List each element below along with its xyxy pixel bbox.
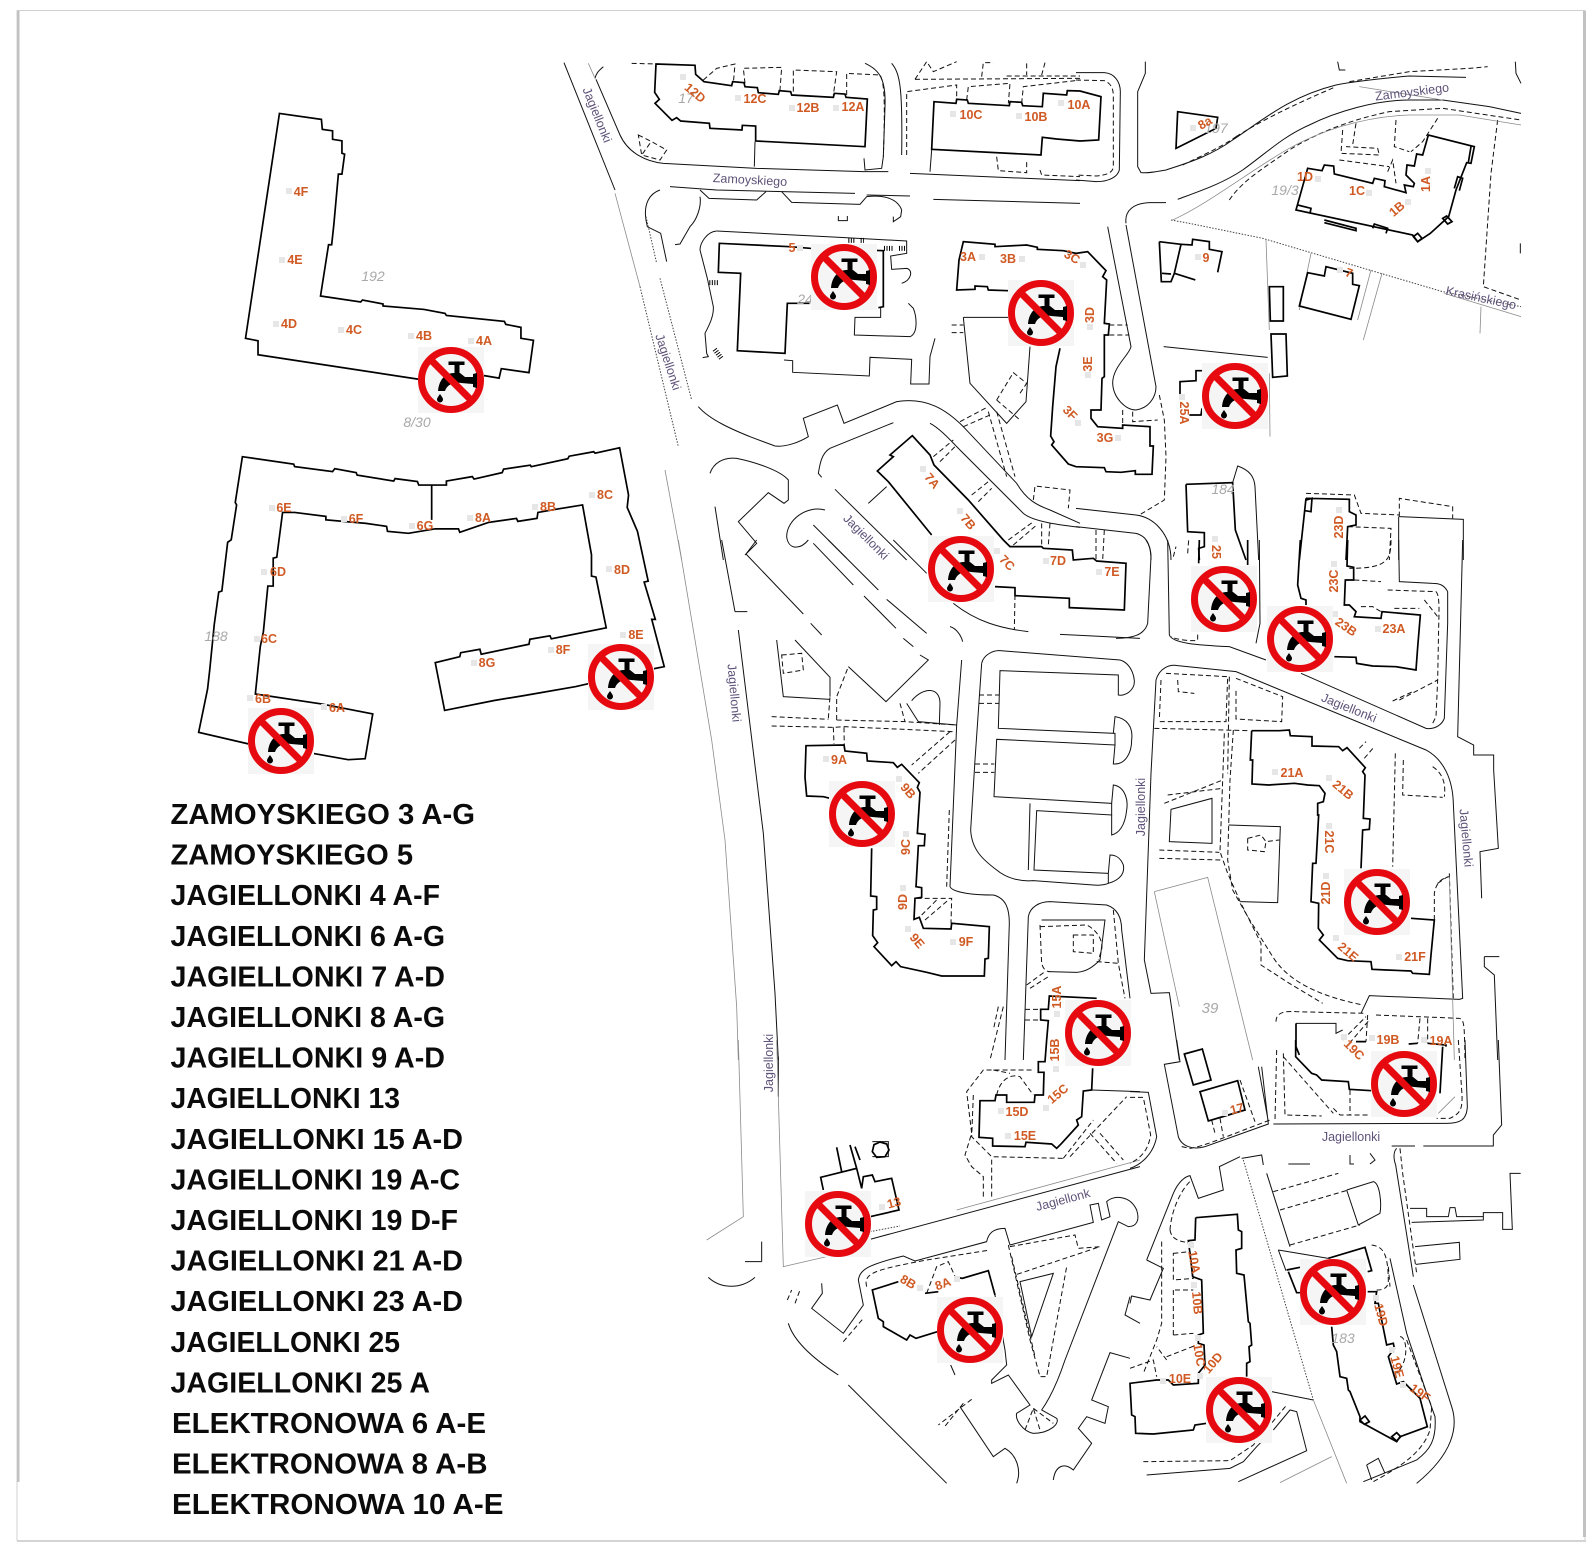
footpaths xyxy=(1130,1040,1462,1482)
building entrance labels: 21C xyxy=(1322,831,1336,853)
street names: Jagiellonki xyxy=(1319,691,1379,725)
roads xyxy=(708,1057,1140,1483)
footpaths xyxy=(1154,540,1465,1060)
building entrance labels: 6C xyxy=(261,632,277,646)
building entrance labels: 10E xyxy=(1169,1372,1191,1386)
gray plot numbers: 188 xyxy=(204,628,228,644)
building entrance labels: 6B xyxy=(255,692,271,706)
building entrance labels: 12A xyxy=(842,100,864,114)
building entrance labels: 15A xyxy=(1050,986,1064,1008)
icon: no water, Elektronowa 8 xyxy=(937,1297,1003,1363)
building entrance labels: 8D xyxy=(614,563,630,577)
street names: Jagiellonki xyxy=(1134,778,1148,836)
building entrance labels: 9B xyxy=(898,780,918,802)
building entrance labels: 1D xyxy=(1297,170,1313,184)
building entrance labels: 4D xyxy=(281,317,297,331)
gray plot numbers: 197 xyxy=(1204,120,1229,136)
icon: no water, Jagiellonki 25A xyxy=(1202,363,1268,429)
footpaths xyxy=(632,62,1080,545)
address list: JAGIELLONKI 19 D-F xyxy=(170,1205,458,1237)
street names: Zamoyskiego xyxy=(713,171,788,189)
map: north-west section xyxy=(564,62,1153,610)
building entrance labels: 9D xyxy=(896,894,910,910)
building entrance labels: 3G xyxy=(1097,431,1113,445)
gray plot numbers: 19/3 xyxy=(1271,182,1299,198)
street names: Zamoyskiego xyxy=(1374,81,1450,103)
building entrance labels: 25A xyxy=(1177,402,1191,424)
building outlines 4, 6 and 8 xyxy=(199,113,664,760)
building entrance labels: 8G xyxy=(479,656,495,670)
street names: Jagiellonki xyxy=(580,85,614,145)
building entrance labels: 13 xyxy=(885,1194,903,1212)
map: south-east section xyxy=(1130,1040,1521,1483)
building entrance labels: 17 xyxy=(1228,1100,1246,1118)
building entrance labels: 7C xyxy=(996,552,1018,574)
icon: no water, Jagiellonki 15 xyxy=(1065,1000,1131,1066)
gray plot numbers: 184 xyxy=(1211,481,1235,497)
building entrance labels: 4B xyxy=(416,329,432,343)
icon: no water, Jagiellonki 4 xyxy=(418,347,484,413)
map: north-east section xyxy=(1076,62,1521,560)
building entrance labels: 4C xyxy=(346,323,362,337)
building entrance labels: 7A xyxy=(922,470,942,492)
building entrance labels: 15B xyxy=(1048,1039,1062,1061)
map: east-central section xyxy=(1116,540,1499,1060)
roads xyxy=(1130,1040,1521,1483)
building entrance labels: 8A xyxy=(475,511,491,525)
roads and parking xyxy=(722,540,1140,1060)
building entrance labels: 3F xyxy=(1060,403,1080,423)
building entrance labels: 19A xyxy=(1430,1034,1452,1048)
building entrance labels: 12C xyxy=(744,92,766,106)
building entrance labels: 7B xyxy=(958,511,978,533)
building entrance labels: 25 xyxy=(1209,545,1223,559)
buildings 17, 19 D-F, elektronowa 10 xyxy=(1130,1040,1443,1442)
building entrance labels: 6A xyxy=(329,701,345,715)
building entrance labels: 23B xyxy=(1333,615,1359,639)
building entrance labels: 1A xyxy=(1419,176,1433,192)
building entrance labels: 10B xyxy=(1189,1291,1205,1315)
building entrance labels: 15C xyxy=(1045,1081,1071,1107)
street names: Jagiellonki xyxy=(1322,1130,1380,1144)
building entrance labels: 10C xyxy=(1190,1342,1208,1368)
building entrance labels: 4A xyxy=(476,334,492,348)
building entrance labels: 10A xyxy=(1068,98,1090,112)
building entrance labels: 3D xyxy=(1083,307,1097,323)
building entrance labels: 3E xyxy=(1081,356,1095,372)
building entrance labels: 15E xyxy=(1014,1129,1036,1143)
building entrance labels: 19E xyxy=(1387,1354,1407,1380)
building entrance labels: 10B xyxy=(1025,110,1047,124)
address list: JAGIELLONKI 13 xyxy=(170,1083,400,1115)
street names: Jagiellonki xyxy=(762,1034,776,1092)
address list: JAGIELLONKI 15 A-D xyxy=(170,1124,463,1156)
address list: JAGIELLONKI 4 A-F xyxy=(170,880,440,912)
address list: JAGIELLONKI 9 A-D xyxy=(170,1043,445,1075)
building entrance labels: 6G xyxy=(417,519,433,533)
map: south-west section xyxy=(707,1040,1140,1483)
building entrance labels: 21E xyxy=(1335,939,1361,965)
icon: no water, Jagiellonki 25 xyxy=(1191,566,1257,632)
building entrance labels: 9E xyxy=(907,931,927,951)
address markers xyxy=(247,74,1431,1388)
building entrance labels: 4E xyxy=(287,253,303,267)
building entrance labels: 9 xyxy=(1203,251,1210,265)
roads xyxy=(1076,62,1521,560)
building entrance labels: 8A xyxy=(933,1275,953,1293)
street names: Jagiellonki xyxy=(840,511,892,563)
address list: JAGIELLONKI 7 A-D xyxy=(170,961,445,993)
building entrance labels: 5 xyxy=(789,241,796,255)
building entrance labels: 9F xyxy=(959,935,974,949)
building entrance labels: 6E xyxy=(276,501,292,515)
gray plot numbers: 39 xyxy=(1202,1000,1219,1017)
footpaths xyxy=(1076,67,1521,560)
building entrance labels: 7D xyxy=(1050,554,1066,568)
building entrance labels: 3C xyxy=(1062,247,1082,267)
address list: ELEKTRONOWA 8 A-B xyxy=(172,1449,488,1481)
gray plot numbers: 192 xyxy=(361,268,385,284)
building entrance labels: 19D xyxy=(1371,1302,1391,1328)
building entrance labels: 23A xyxy=(1383,622,1405,636)
building entrance labels: 10D xyxy=(1200,1350,1226,1376)
address list: ELEKTRONOWA 6 A-E xyxy=(172,1408,486,1440)
address list xyxy=(170,799,504,1521)
street names: Jagiellonki xyxy=(724,663,744,723)
building entrance labels: 8B xyxy=(898,1272,918,1292)
street names: Krasińskiego xyxy=(1445,284,1517,312)
address list: JAGIELLONKI 23 A-D xyxy=(170,1286,463,1318)
building entrance labels: 23D xyxy=(1332,516,1346,538)
icon: no water, Jagiellonki 6 xyxy=(248,708,314,774)
address list: ZAMOYSKIEGO 3 A-G xyxy=(170,799,475,831)
building entrance labels xyxy=(255,80,1452,1405)
address list: JAGIELLONKI 6 A-G xyxy=(170,921,445,953)
building entrance labels: 1B xyxy=(1386,199,1408,219)
gray plot numbers: 183 xyxy=(1331,1330,1355,1346)
building entrance labels: 8B xyxy=(540,500,556,514)
building entrance labels: 7 xyxy=(1343,265,1355,281)
street names: Jagiellonki xyxy=(652,332,684,392)
dash-dot boundary lines xyxy=(1171,220,1521,307)
building entrance labels: 8E xyxy=(628,628,644,642)
gray plot numbers: 24 xyxy=(796,291,813,307)
building entrance labels: 1C xyxy=(1349,184,1365,198)
building entrance labels: 19C xyxy=(1341,1037,1367,1063)
building entrance labels: 6F xyxy=(349,512,364,526)
building entrance labels: 21A xyxy=(1281,766,1303,780)
building entrance labels: 9C xyxy=(899,839,913,855)
building entrance labels: 19B xyxy=(1377,1033,1399,1047)
building entrance labels: 12D xyxy=(682,80,708,106)
map: central section xyxy=(678,540,1140,1060)
building entrance labels: 10C xyxy=(960,108,982,122)
gray plot numbers: 17 xyxy=(678,90,695,106)
address list: JAGIELLONKI 19 A-C xyxy=(170,1164,460,1196)
stair hatching xyxy=(709,240,906,358)
building entrance labels: 3A xyxy=(960,250,976,264)
building entrance labels: 10A xyxy=(1185,1249,1203,1275)
buildings 8a, 1, 9, 7, 25, 25A, 23 xyxy=(1159,112,1474,560)
footpaths xyxy=(787,1070,1127,1430)
building entrance labels: 4F xyxy=(294,185,309,199)
address list: JAGIELLONKI 8 A-G xyxy=(170,1002,445,1034)
icon: no water, Jagiellonki 19 D-F xyxy=(1300,1259,1366,1325)
icon: no water, Elektronowa 10 xyxy=(1206,1377,1272,1443)
building entrance labels: 15D xyxy=(1006,1105,1028,1119)
panel: enlarged plan of buildings 4, 6 and 8 xyxy=(199,62,1521,1483)
street names xyxy=(580,81,1517,1214)
building entrance labels: 8a xyxy=(1195,113,1215,133)
gray plot numbers xyxy=(204,90,1355,1346)
building entrance labels: 23C xyxy=(1327,570,1341,592)
buildings 21, 23, 25, 19 xyxy=(1199,540,1446,1055)
icon: no water, Jagiellonki 8 xyxy=(588,644,654,710)
icon: no water, Jagiellonki 7 xyxy=(928,536,994,602)
building entrance labels: 9A xyxy=(831,753,847,767)
buildings 9 and 15 xyxy=(805,745,1097,1040)
street names: Jagiellonk xyxy=(1034,1186,1092,1214)
address list: ELEKTRONOWA 10 A-E xyxy=(172,1489,504,1521)
icon: no water, Jagiellonki 13 xyxy=(805,1191,871,1257)
roads xyxy=(564,63,1080,560)
address list: JAGIELLONKI 25 xyxy=(170,1327,400,1359)
icon: no water, Zamoyskiego 3 xyxy=(1008,280,1074,346)
icon: no water, Jagiellonki 21 xyxy=(1344,869,1410,935)
buildings 12, 10, 5, 3, 7 xyxy=(655,64,1153,610)
building entrance labels: 12B xyxy=(797,101,819,115)
building entrance labels: 21B xyxy=(1330,777,1356,803)
address list: JAGIELLONKI 25 A xyxy=(170,1367,430,1399)
street names: Jagiellonki xyxy=(1456,808,1476,868)
building entrance labels: 21D xyxy=(1319,882,1333,904)
dotted lot lines xyxy=(640,217,692,447)
building entrance labels: 8C xyxy=(597,488,613,502)
building entrance labels: 21F xyxy=(1404,950,1426,964)
roads xyxy=(1116,540,1499,1060)
address list: JAGIELLONKI 21 A-D xyxy=(170,1246,463,1278)
building entrance labels: 3B xyxy=(1000,252,1016,266)
building entrance labels: 8F xyxy=(556,643,571,657)
icon: no water, Jagiellonki 9 xyxy=(829,781,895,847)
buildings 15, 13, elektronowa 8 xyxy=(821,1040,1093,1340)
building entrance labels: 6D xyxy=(270,565,286,579)
gray plot numbers: 8/30 xyxy=(403,414,431,430)
icon: no water, Jagiellonki 23 xyxy=(1267,606,1333,672)
icon: no water, Jagiellonki 19 A-C xyxy=(1371,1051,1437,1117)
footpaths xyxy=(772,595,1125,1060)
building entrance labels: 7E xyxy=(1104,565,1120,579)
building entrance labels: 19F xyxy=(1407,1381,1433,1405)
icon: no water, Zamoyskiego 5 xyxy=(811,244,877,310)
address list: ZAMOYSKIEGO 5 xyxy=(170,840,413,872)
